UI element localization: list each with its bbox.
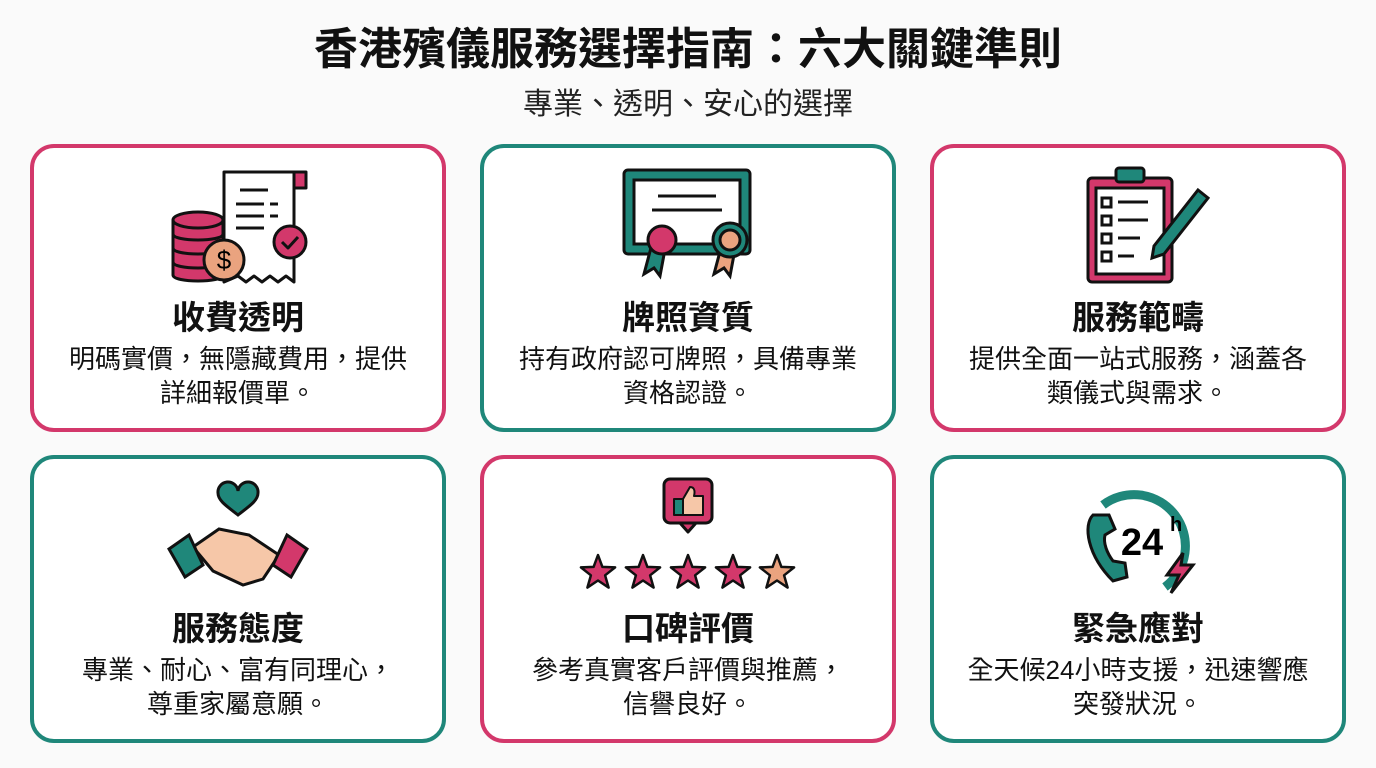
- text: 資格認證。: [623, 378, 753, 408]
- text: 信譽良好。: [623, 689, 753, 719]
- title: 香港殯儀服務選擇指南：六大關鍵準則: [314, 25, 1062, 74]
- text: [532, 655, 844, 719]
- text: 尊重家屬意願。: [147, 689, 329, 719]
- panel: fees: [30, 144, 446, 432]
- icon: thumbs up and stars: [580, 478, 796, 589]
- text: 參考真實客戶評價與推薦，: [532, 655, 844, 685]
- heading: 牌照資質: [622, 299, 754, 336]
- heading: 服務態度: [172, 610, 304, 647]
- panel: emergency: [930, 455, 1346, 743]
- text: 專業、耐心、富有同理心，: [82, 655, 394, 685]
- heading: 口碑評價: [622, 610, 754, 647]
- icon: 24h phone: h: [1170, 514, 1182, 536]
- panel: attitude: [30, 455, 446, 743]
- heading: 緊急應對: [1072, 610, 1204, 647]
- panel: license: [480, 144, 896, 432]
- heading: 收費透明: [172, 299, 304, 336]
- text: 持有政府認可牌照，具備專業: [519, 344, 857, 374]
- text: 提供全面一站式服務，涵蓋各: [969, 344, 1307, 374]
- text: 明碼實價，無隱藏費用，提供: [69, 344, 407, 374]
- icon: clipboard: [1086, 166, 1210, 284]
- text: [519, 344, 857, 408]
- icon: certificate: [622, 168, 752, 280]
- icon: handshake with heart: [167, 480, 309, 587]
- subtitle: 專業、透明、安心的選擇: [523, 88, 853, 121]
- icon: 24h phone: [1086, 490, 1196, 594]
- text: 詳細報價單。: [160, 378, 316, 408]
- panel: scope: [930, 144, 1346, 432]
- text: [969, 344, 1307, 408]
- panel: reputation: [480, 455, 896, 743]
- icon: coins and receipt: [172, 170, 308, 284]
- text: [82, 655, 394, 719]
- text: 類儀式與需求。: [1047, 378, 1229, 408]
- text: 全天候24小時支援，迅速響應: [968, 655, 1308, 685]
- text: [968, 655, 1308, 719]
- icon: 24h phone: 24: [1121, 522, 1163, 564]
- icon: coins and receipt: $: [217, 245, 232, 275]
- text: 突發狀況。: [1073, 689, 1203, 719]
- text: [69, 344, 407, 408]
- heading: 服務範疇: [1072, 299, 1204, 336]
